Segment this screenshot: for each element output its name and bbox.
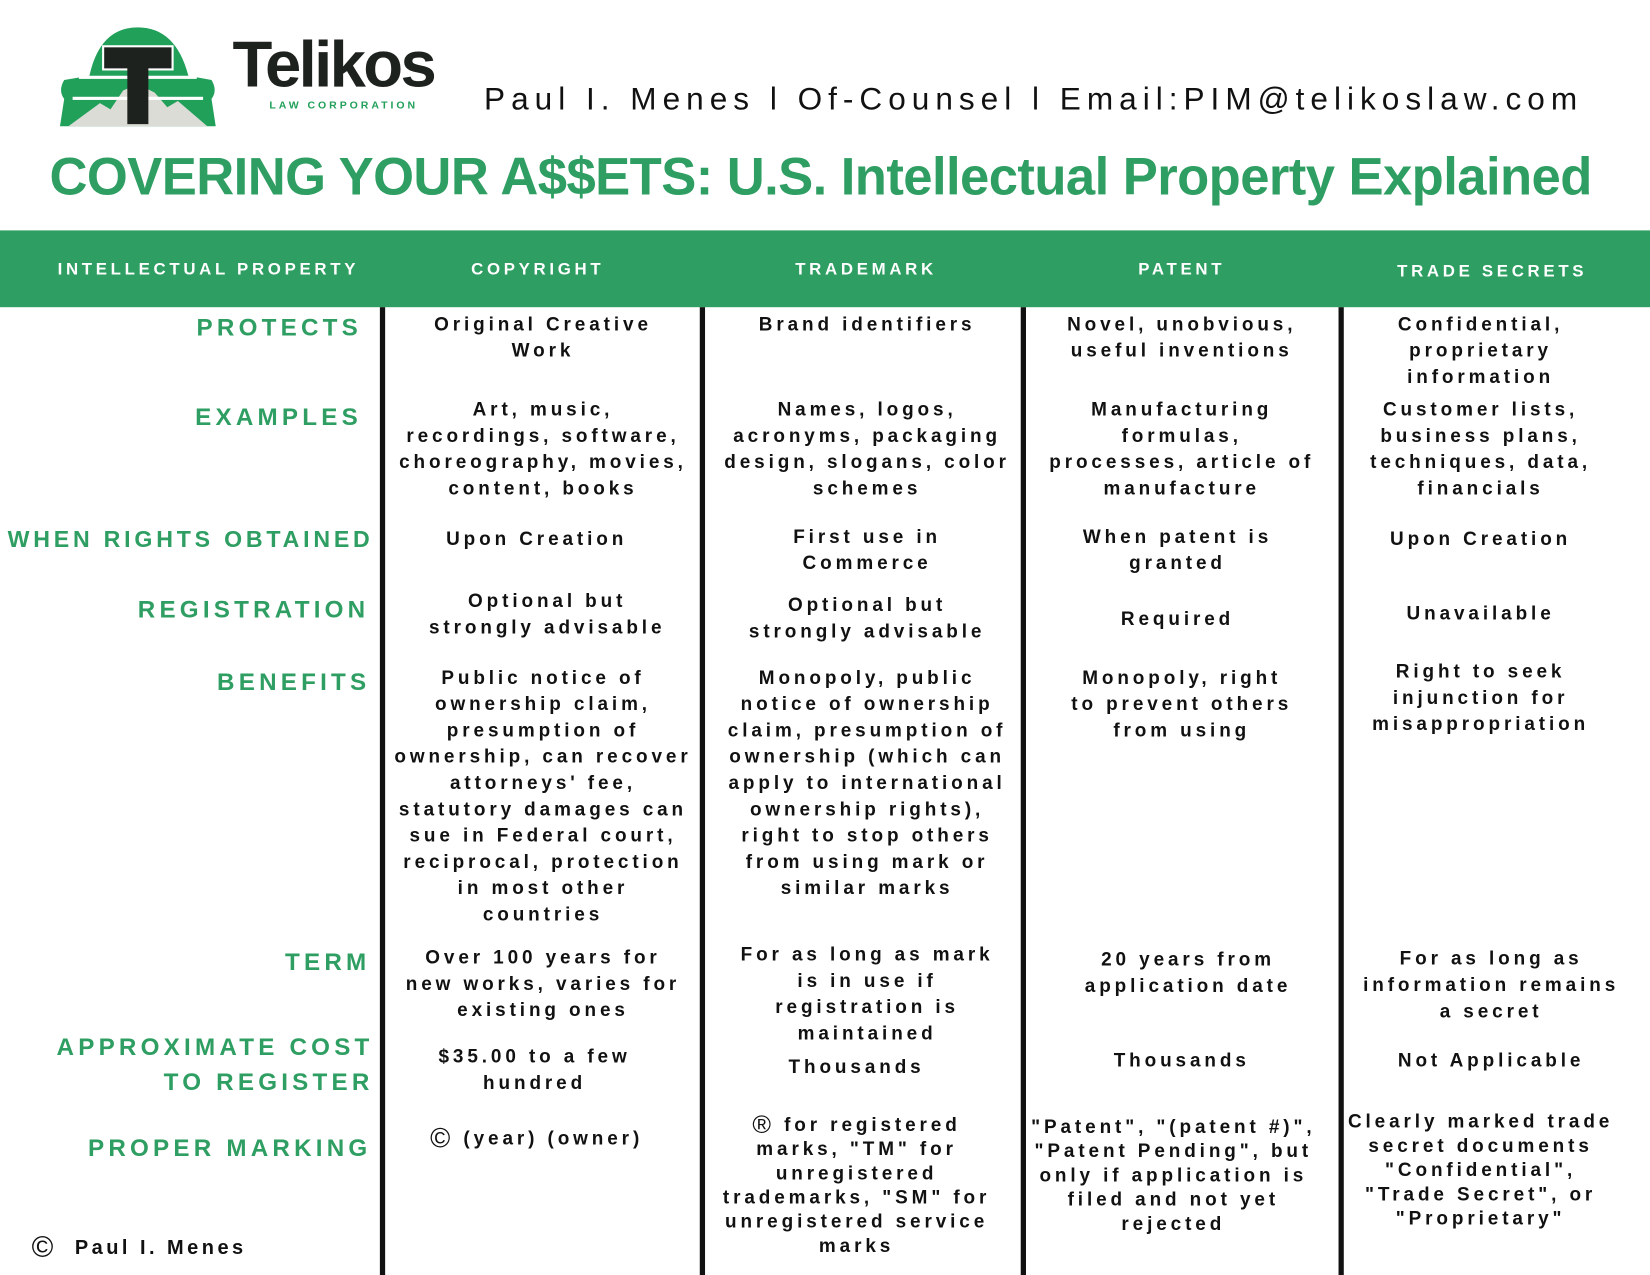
header: patent: PATENT <box>1138 261 1225 279</box>
row: proper marking: "Proprietary" <box>1396 1208 1565 1229</box>
row: when rights obtained: Upon Creation <box>1390 528 1571 549</box>
row: proper marking: unregistered service <box>725 1211 988 1232</box>
row: proper marking <box>430 1111 1613 1256</box>
row: term: is in use if <box>797 970 937 991</box>
row: term <box>406 944 1619 1044</box>
row: examples: techniques, data, <box>1370 451 1591 472</box>
row: examples: financials <box>1417 478 1544 499</box>
row: examples: formulas, <box>1122 425 1242 446</box>
row: benefits: statutory damages can <box>399 798 687 820</box>
row: examples: Names, logos, <box>778 399 957 420</box>
row: registration <box>429 590 1555 642</box>
row: benefits: misappropriation <box>1372 713 1589 734</box>
contact line: Paul I. Menes l Of-Counsel l Email:PIM@telikoslaw.com <box>484 82 1583 117</box>
row: protects: Confidential, <box>1398 313 1563 335</box>
row: benefits: claim, presumption of <box>728 720 1006 741</box>
row: proper marking: "Trade Secret", or <box>1365 1184 1596 1205</box>
footer credit: © Paul I. Menes <box>32 1231 247 1263</box>
row: when rights obtained: Commerce <box>803 552 932 573</box>
row: benefits: similar marks <box>781 877 953 898</box>
row: term: registration is <box>775 996 959 1017</box>
row: proper marking: secret documents <box>1368 1135 1593 1156</box>
row: examples: processes, article of <box>1049 451 1314 472</box>
row: benefits: apply to international <box>728 772 1006 793</box>
row: benefits: Right to seek <box>1396 661 1565 682</box>
row: benefits: ownership, can recover <box>394 746 692 767</box>
row: benefits: in most other <box>458 877 628 898</box>
row: when rights obtained <box>446 526 1571 573</box>
label: benefits: BENEFITS <box>217 668 370 695</box>
row: term: For as long as mark <box>741 944 994 965</box>
row: protects: Brand identifiers <box>759 313 975 335</box>
row: examples: schemes <box>813 478 921 499</box>
row: benefits: countries <box>483 904 603 925</box>
row: approximate cost: hundred <box>483 1072 586 1093</box>
label: protects: PROTECTS <box>197 313 362 341</box>
row: benefits: sue in Federal court, <box>409 825 676 846</box>
label: approximate cost: TO REGISTER <box>164 1068 374 1095</box>
row: proper marking: marks <box>819 1235 894 1256</box>
row: benefits: from using <box>1113 720 1250 741</box>
label: examples: EXAMPLES <box>195 403 362 430</box>
row: examples: business plans, <box>1380 425 1581 446</box>
row: when rights obtained: First use in <box>793 526 941 547</box>
row: term: Over 100 years for <box>425 947 661 968</box>
row: term: information remains <box>1363 974 1619 995</box>
row: approximate cost: Thousands <box>789 1056 925 1077</box>
label: registration: REGISTRATION <box>138 595 369 623</box>
row: registration: strongly advisable <box>429 616 665 638</box>
logo <box>60 27 434 126</box>
row: benefits: presumption of <box>447 720 639 741</box>
row: proper marking: © (year) (owner) <box>430 1122 643 1154</box>
row: term: a secret <box>1440 1000 1542 1021</box>
row: term: new works, varies for <box>406 973 680 994</box>
row: benefits: Monopoly, public <box>759 667 975 688</box>
row: proper marking: rejected <box>1121 1213 1225 1234</box>
row: proper marking: trademarks, "SM" for <box>723 1187 990 1208</box>
row: proper marking: "Patent Pending", but <box>1035 1140 1312 1161</box>
row: benefits: injunction for <box>1393 687 1568 708</box>
header: trademark: TRADEMARK <box>795 261 937 279</box>
row: benefits: Public notice of <box>441 667 645 688</box>
row: term: existing ones <box>457 999 629 1020</box>
row: benefits: ownership rights), <box>750 798 984 820</box>
row: examples <box>399 399 1591 499</box>
row: proper marking: marks, "TM" for <box>756 1138 957 1159</box>
row: proper marking: "Confidential", <box>1385 1159 1576 1180</box>
label: when rights obtained: WHEN RIGHTS OBTAINED <box>8 526 374 552</box>
row: examples: Art, music, <box>473 399 613 420</box>
row: registration: Optional but <box>468 590 626 611</box>
row: registration: strongly advisable <box>749 621 985 642</box>
header: intellectual property: INTELLECTUAL PROPERTY <box>58 261 359 279</box>
row: examples: content, books <box>448 478 638 499</box>
row: benefits: ownership (which can <box>729 746 1005 767</box>
row: benefits: from using mark or <box>746 851 988 872</box>
row: proper marking: only if application is <box>1039 1165 1307 1186</box>
row: registration: Required <box>1121 608 1234 629</box>
row: examples: recordings, software, <box>406 425 680 446</box>
row: proper marking: unregistered <box>776 1162 937 1184</box>
label: approximate cost <box>57 1033 374 1095</box>
header: copyright: COPYRIGHT <box>471 261 604 279</box>
header bar <box>0 230 1650 307</box>
row: benefits: attorneys' fee, <box>450 772 636 793</box>
icon: logo mark <box>60 27 216 126</box>
wordmark: Telikos <box>233 28 434 101</box>
row: term: application date <box>1085 975 1291 996</box>
row: protects: Novel, unobvious, <box>1067 313 1296 335</box>
row: term: maintained <box>798 1023 937 1044</box>
row: approximate cost <box>438 1046 1584 1093</box>
row: protects: information <box>1407 366 1554 387</box>
row: when rights obtained: Upon Creation <box>446 528 627 549</box>
row: benefits: notice of ownership <box>741 693 994 714</box>
row: benefits: reciprocal, protection <box>403 851 683 872</box>
row: proper marking: "Patent", "(patent #)", <box>1031 1116 1316 1137</box>
row: approximate cost: $35.00 to a few <box>438 1046 631 1067</box>
row: when rights obtained: When patent is <box>1083 526 1272 547</box>
row: approximate cost: Thousands <box>1114 1050 1250 1071</box>
row: examples: Customer lists, <box>1383 399 1578 420</box>
row: term: For as long as <box>1400 948 1583 969</box>
row: proper marking: ® for registered <box>752 1111 961 1139</box>
row: term: 20 years from <box>1101 949 1275 970</box>
row: benefits: right to stop others <box>741 825 993 846</box>
row: examples: manufacture <box>1103 478 1260 499</box>
row: registration: Unavailable <box>1407 603 1555 624</box>
row: protects: Work <box>512 340 574 361</box>
row: registration: Optional but <box>788 594 946 615</box>
row: benefits: to prevent others <box>1071 693 1292 714</box>
row: proper marking: Clearly marked trade <box>1348 1111 1613 1132</box>
label: term: TERM <box>285 948 370 975</box>
row: examples: acronyms, packaging <box>733 425 1001 446</box>
label: proper marking: PROPER MARKING <box>88 1134 371 1161</box>
row: examples: Manufacturing <box>1091 399 1272 420</box>
row: benefits <box>394 661 1589 925</box>
row: when rights obtained: granted <box>1129 552 1226 573</box>
row: examples: choreography, movies, <box>399 451 687 472</box>
row: protects: useful inventions <box>1071 340 1293 361</box>
row: benefits: Monopoly, right <box>1082 667 1281 688</box>
row: approximate cost: Not Applicable <box>1398 1050 1584 1071</box>
row: proper marking: filed and not yet <box>1068 1189 1279 1210</box>
label: approximate cost: APPROXIMATE COST <box>57 1033 374 1060</box>
row: protects: Original Creative <box>434 313 652 335</box>
row: benefits: ownership claim, <box>435 693 651 714</box>
title: COVERING YOUR A$$ETS: U.S. Intellectual Property Explained <box>49 147 1592 206</box>
header: trade secrets: TRADE SECRETS <box>1397 263 1587 281</box>
row: examples: design, slogans, color <box>724 451 1010 472</box>
row: protects: proprietary <box>1409 340 1552 361</box>
row: protects <box>434 313 1563 387</box>
tagline: LAW CORPORATION <box>269 100 418 112</box>
